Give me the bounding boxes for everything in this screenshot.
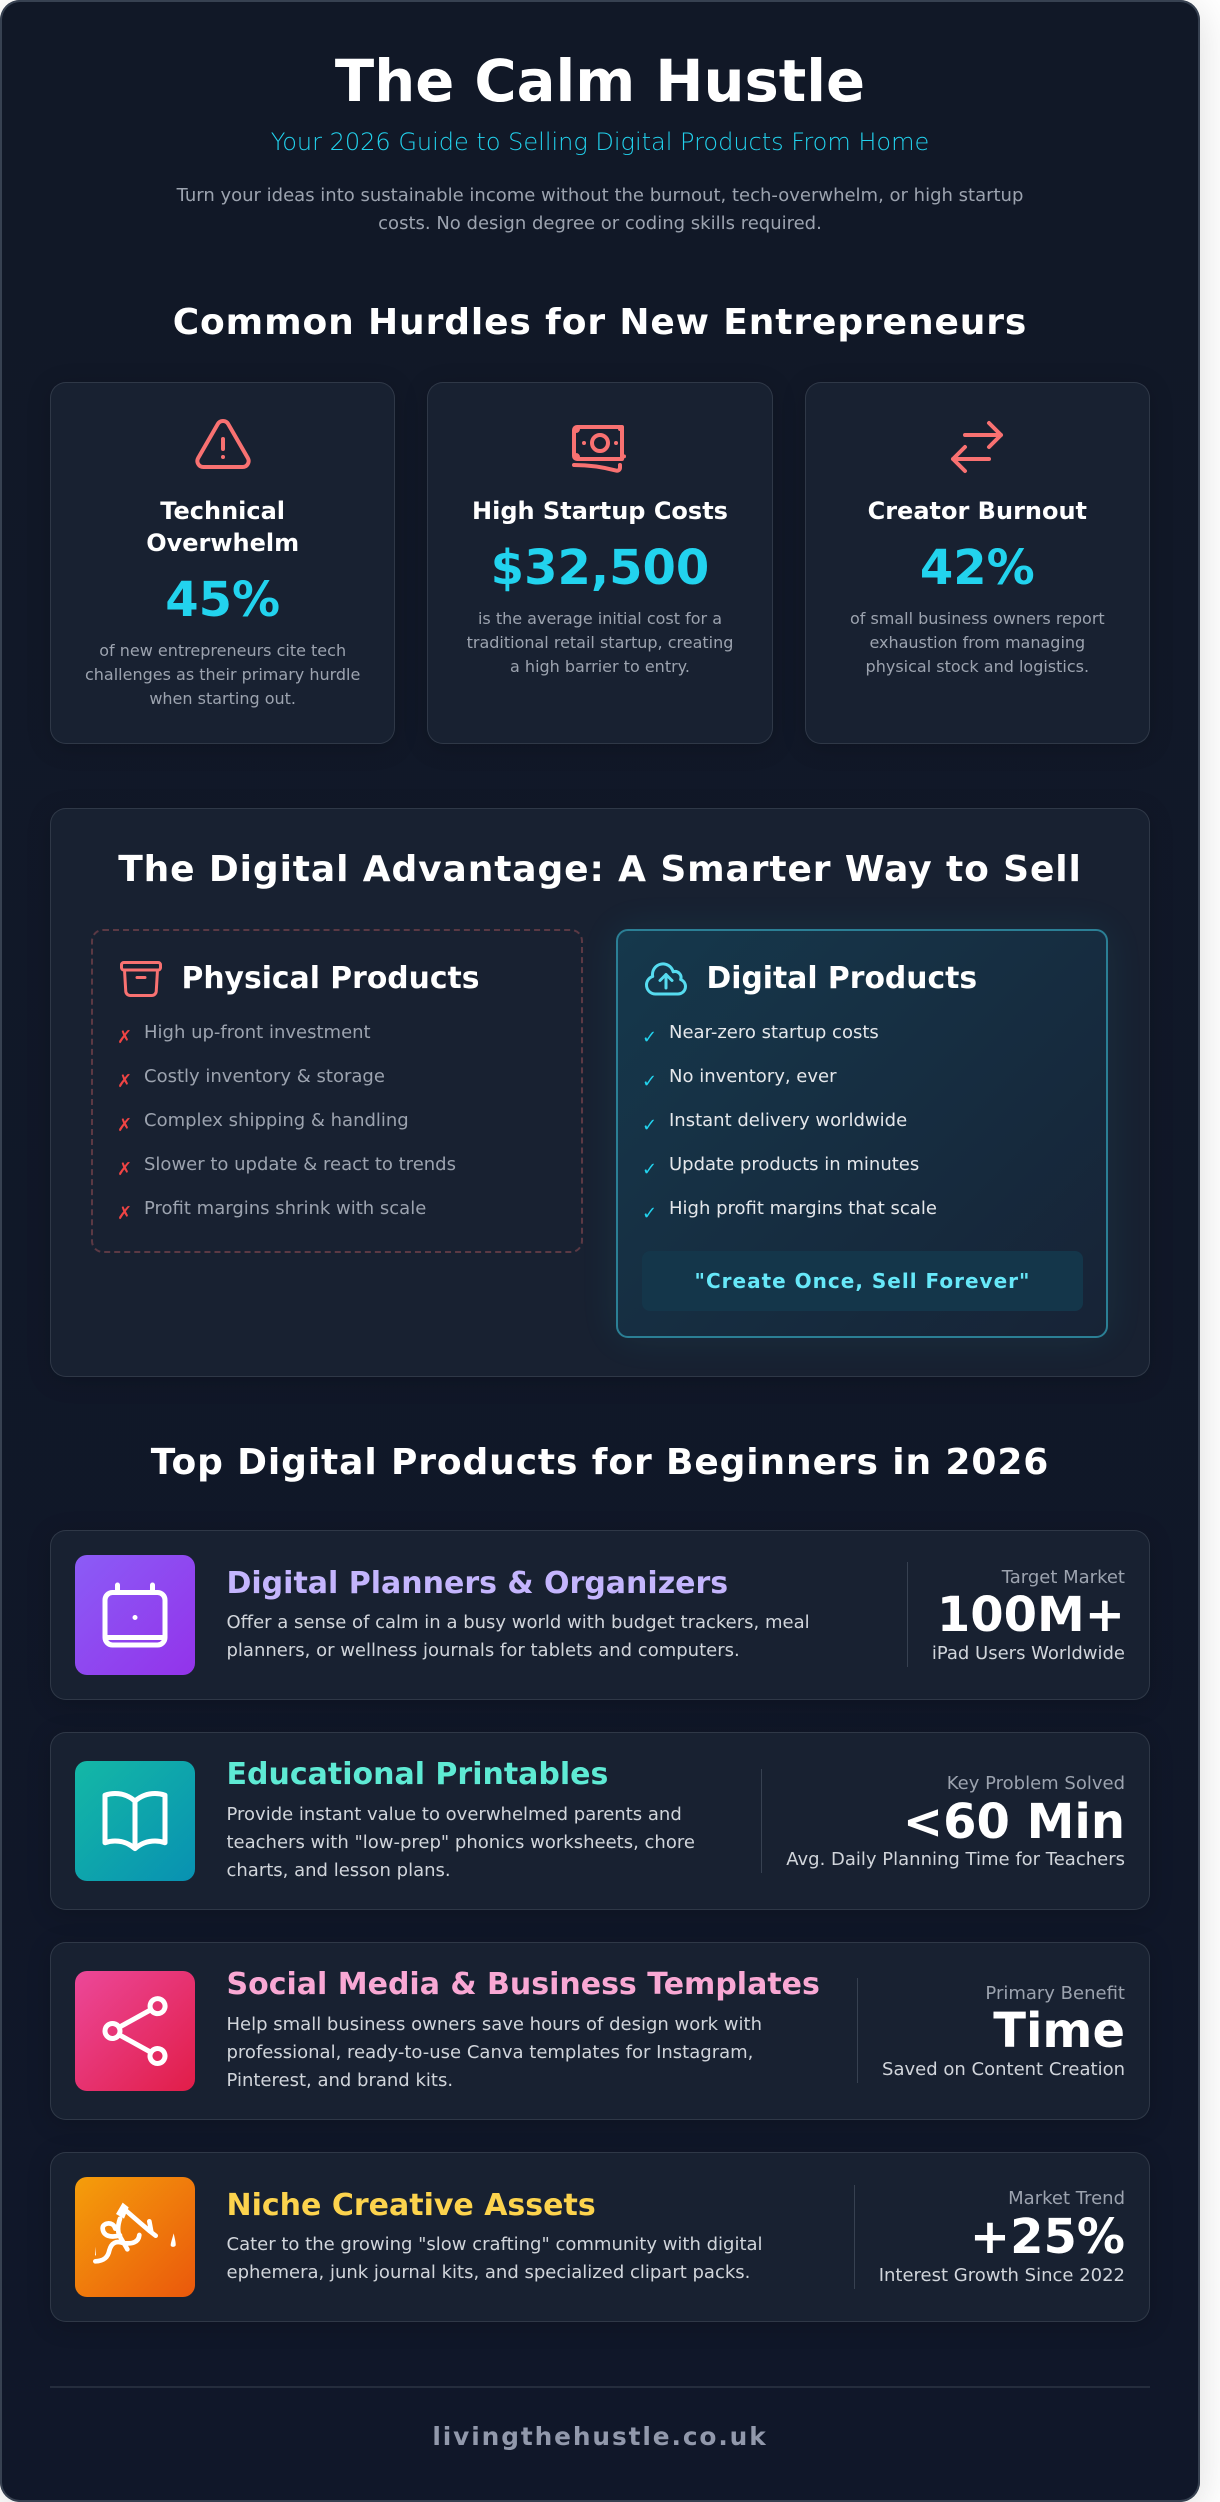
digital list: High profit margins that scale <box>669 1198 937 1219</box>
intro text: Turn your ideas into sustainable income without the burnout, tech-overwhelm, or high startup <box>177 184 1023 206</box>
icon: archive box <box>120 961 162 997</box>
physical heading: Physical Products <box>182 961 479 996</box>
panel: digital advantage <box>50 808 1150 1377</box>
product description: charts, and lesson plans. <box>226 1860 451 1881</box>
intro text: costs. No design degree or coding skills required. <box>378 212 822 234</box>
panel: digital products <box>616 929 1108 1338</box>
stat: 42%: 42% <box>920 540 1035 596</box>
product title: Niche Creative Assets <box>226 2188 596 2223</box>
digital heading: Digital Products <box>706 961 977 996</box>
card description: is the average initial cost for a <box>478 608 722 628</box>
icon: cloud upload <box>645 962 687 996</box>
panel: niche creative assets <box>50 2152 1150 2322</box>
physical list: ✗ <box>117 1027 132 1048</box>
icon: calendar tile <box>75 1555 195 1675</box>
subtitle: Your 2026 Guide to Selling Digital Products From Home <box>271 128 929 156</box>
physical list: ✗ <box>117 1159 132 1180</box>
heading: common hurdles: Common Hurdles for New Entrepreneurs <box>173 302 1027 342</box>
divider <box>854 2185 855 2289</box>
product title: Social Media & Business Templates <box>226 1967 820 2002</box>
product description: Help small business owners save hours of design work with <box>226 2014 762 2035</box>
callout <box>642 1251 1083 1311</box>
digital list: ✓ <box>642 1159 657 1180</box>
card description: a high barrier to entry. <box>510 656 690 676</box>
icon: arrows right left <box>950 420 1004 474</box>
divider <box>857 1978 858 2083</box>
digital list: No inventory, ever <box>669 1066 837 1087</box>
card description <box>467 608 733 676</box>
footer url: livingthehustle.co.uk <box>432 2422 768 2450</box>
product description: Pinterest, and brand kits. <box>226 2070 453 2091</box>
product description: ephemera, junk journal kits, and specialized clipart packs. <box>226 2262 750 2283</box>
card description: traditional retail startup, creating <box>467 632 733 652</box>
card title <box>146 497 299 557</box>
panel: educational printables <box>50 1732 1150 1910</box>
card title: High Startup Costs <box>472 497 728 525</box>
digital list: ✓ <box>642 1071 657 1092</box>
card title: Creator Burnout <box>868 497 1087 525</box>
digital list: ✓ <box>642 1115 657 1136</box>
product description: teachers with "low-prep" phonics worksheets, chore <box>226 1832 695 1853</box>
digital list: ✓ <box>642 1203 657 1224</box>
physical list: Costly inventory & storage <box>144 1066 385 1087</box>
divider <box>761 1769 762 1873</box>
card description: of small business owners report <box>850 608 1105 628</box>
intro text <box>176 184 1023 234</box>
stat value: 100M+ <box>937 1587 1125 1643</box>
stat value: <60 Min <box>903 1794 1125 1850</box>
stat label: Key Problem Solved <box>947 1773 1125 1794</box>
icon: share tile <box>75 1971 195 2091</box>
product description: Offer a sense of calm in a busy world with budget trackers, meal <box>226 1612 810 1633</box>
physical list: Complex shipping & handling <box>144 1110 409 1131</box>
card description: when starting out. <box>149 688 296 708</box>
product description <box>226 2014 762 2091</box>
stat sublabel: Saved on Content Creation <box>882 2059 1125 2080</box>
stat sublabel: iPad Users Worldwide <box>932 1643 1125 1664</box>
panel: digital planners <box>50 1530 1150 1700</box>
digital list: ✓ <box>642 1027 657 1048</box>
product description: planners, or wellness journals for tablets and computers. <box>226 1640 740 1661</box>
card description: physical stock and logistics. <box>866 656 1089 676</box>
stat label: Target Market <box>1002 1567 1125 1588</box>
digital list <box>642 1022 937 1224</box>
product description: professional, ready-to-use Canva templates for Instagram, <box>226 2042 753 2063</box>
product description <box>226 2234 763 2283</box>
card title: Overwhelm <box>146 529 299 557</box>
physical list: ✗ <box>117 1203 132 1224</box>
icon: banknotes <box>572 425 626 473</box>
panel: creator burnout <box>805 382 1150 744</box>
product description <box>226 1612 810 1661</box>
title: The Calm Hustle <box>335 48 865 114</box>
digital list: Near-zero startup costs <box>669 1022 879 1043</box>
stat value: Time <box>993 2003 1125 2059</box>
stat: $32,500: $32,500 <box>491 540 709 596</box>
card description <box>850 608 1105 676</box>
physical list <box>117 1022 456 1224</box>
panel: physical products <box>91 929 583 1252</box>
callout: "Create Once, Sell Forever" <box>695 1269 1030 1293</box>
card description: of new entrepreneurs cite tech <box>99 640 346 660</box>
physical list: ✗ <box>117 1071 132 1092</box>
digital list: Update products in minutes <box>669 1154 919 1175</box>
stat sublabel: Interest Growth Since 2022 <box>879 2265 1125 2286</box>
stat: 45%: 45% <box>165 572 280 628</box>
icon: open book tile <box>75 1761 195 1881</box>
stat value: +25% <box>970 2209 1125 2265</box>
card title: Technical <box>160 497 285 525</box>
stat sublabel: Avg. Daily Planning Time for Teachers <box>786 1849 1125 1870</box>
physical list: High up-front investment <box>144 1022 371 1043</box>
card description: exhaustion from managing <box>869 632 1085 652</box>
panel: social media templates <box>50 1942 1150 2120</box>
product description: Cater to the growing "slow crafting" community with digital <box>226 2234 763 2255</box>
heading: top digital products: Top Digital Products for Beginners in 2026 <box>151 1442 1049 1483</box>
panel: high startup costs <box>427 382 773 744</box>
icon: warning triangle <box>195 419 251 469</box>
card description: challenges as their primary hurdle <box>85 664 360 684</box>
heading: digital advantage: The Digital Advantage: A Smarter Way to Sell <box>118 848 1082 890</box>
physical list: Profit margins shrink with scale <box>144 1198 426 1219</box>
product description: Provide instant value to overwhelmed parents and <box>226 1804 682 1825</box>
divider <box>907 1562 908 1667</box>
stat label: Primary Benefit <box>985 1983 1125 2004</box>
digital list: Instant delivery worldwide <box>669 1110 907 1131</box>
card description <box>85 640 360 708</box>
physical list: ✗ <box>117 1115 132 1136</box>
stat label: Market Trend <box>1008 2188 1125 2209</box>
physical list: Slower to update & react to trends <box>144 1154 456 1175</box>
product description <box>226 1804 695 1881</box>
panel: technical overwhelm <box>50 382 395 744</box>
product title: Educational Printables <box>226 1757 608 1792</box>
product title: Digital Planners & Organizers <box>226 1566 728 1601</box>
icon: sparkle tile <box>75 2177 195 2297</box>
